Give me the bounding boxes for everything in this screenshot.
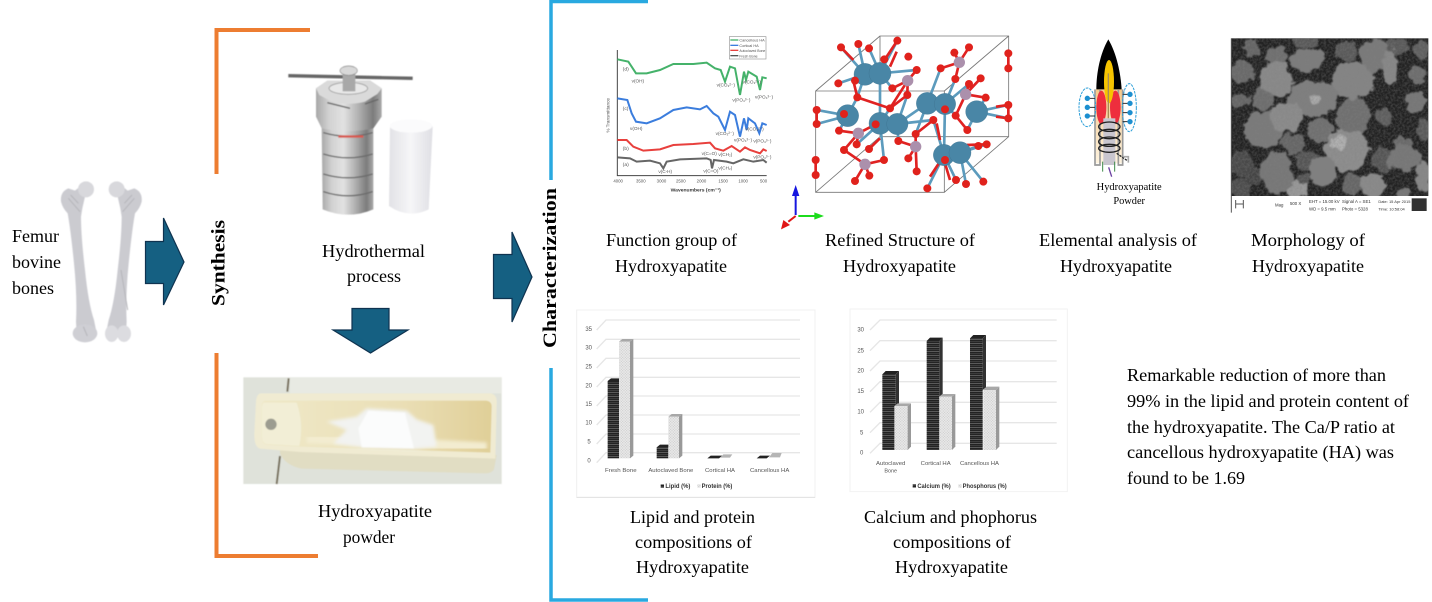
- SEM data bar: Photo = 5328: [1342, 206, 1368, 211]
- text: lipid and protein compositions: Lipid and protein: [630, 507, 755, 527]
- y axis labels: 25: [585, 365, 593, 371]
- image: SEM morphology: [1228, 36, 1431, 213]
- purple atoms: [853, 57, 971, 170]
- axis labels and peak labels: ν(C-H): [658, 169, 672, 174]
- y axis labels: 0: [860, 451, 864, 457]
- text: calcium and phosphorus compositions: [864, 507, 1037, 577]
- y axis labels: 5: [860, 430, 864, 436]
- y axis labels: 20: [857, 369, 865, 375]
- category labels and legend: Cortical HA: [921, 461, 951, 467]
- SEM particle clusters: [1228, 36, 1431, 199]
- bars: cortical HA: [927, 338, 955, 450]
- category labels and legend: Protein (%): [702, 484, 732, 490]
- axis labels and peak labels: ν(C=O): [702, 151, 717, 156]
- category labels and legend: Lipid (%): [665, 484, 690, 490]
- SEM data bar: Date: 15 Apr 2015: [1378, 199, 1411, 204]
- text: hydrothermal process: Hydrothermal: [322, 241, 425, 261]
- category labels and legend: [876, 461, 1007, 490]
- spectrum: d green: [617, 59, 767, 95]
- blue bracket: characterization bottom: [551, 368, 648, 600]
- axis labels and peak labels: (a): [623, 162, 629, 168]
- axis labels and peak labels: 2000: [697, 179, 707, 184]
- image: refined crystal structure: [781, 36, 1012, 229]
- bars: autoclaved bone: [657, 414, 682, 458]
- category labels and legend: Cancellous HA: [750, 468, 790, 474]
- text: refined structure of hydroxyapatite: Hydroxyapatite: [843, 256, 956, 276]
- text: morphology of hydroxyapatite: Hydroxyapatite: [1252, 256, 1364, 276]
- y axis labels: 25: [857, 348, 865, 354]
- white liner: [389, 121, 433, 214]
- y axis labels: 0: [587, 458, 591, 464]
- orange bracket: synthesis bottom: [216, 353, 318, 556]
- yellow flame: [1104, 60, 1114, 103]
- SEM data bar: 500 X: [1290, 201, 1301, 206]
- legend: Cancellous HA: [739, 38, 765, 43]
- category labels and legend: [605, 468, 790, 490]
- red atoms: [812, 37, 1012, 192]
- axis labels and peak labels: 2500: [676, 179, 686, 184]
- y axis labels: [585, 327, 593, 464]
- orange bracket: synthesis top: [216, 30, 310, 174]
- bars: cancellous HA: [970, 335, 999, 450]
- SEM data bar: [1231, 38, 1428, 213]
- axis labels and peak labels: ν(CO₃²⁻): [743, 79, 761, 84]
- axis labels and peak labels: ν(PO₄³⁻): [734, 138, 753, 143]
- axis labels and peak labels: 1000: [738, 179, 749, 184]
- text: lipid and protein compositions: Hydroxyapatite: [636, 557, 749, 577]
- axis labels and peak labels: 1500: [718, 179, 729, 184]
- image: hydrothermal autoclave and liner: [288, 66, 433, 215]
- caption: hydroxyapatite powder: [1097, 182, 1162, 207]
- text: elemental analysis of hydroxyapatite: Elemental analysis of: [1039, 230, 1197, 250]
- SEM data bar: Signal A = SE1: [1342, 199, 1371, 204]
- y axis labels: 35: [585, 327, 593, 333]
- text block: findings summary: Remarkable reduction of more than: [1127, 365, 1386, 385]
- text: lipid and protein compositions: [630, 507, 755, 577]
- y axis labels: [857, 328, 865, 457]
- text: morphology of hydroxyapatite: [1251, 230, 1365, 276]
- axis labels and peak labels: ν(PO₄³⁻): [755, 94, 774, 99]
- heading: characterization: Characterization: [540, 188, 561, 348]
- axis labels and peak labels: (d): [623, 67, 629, 73]
- chart: FTIR spectra: [605, 37, 774, 194]
- SEM data bar: Time: 10:58:04: [1378, 206, 1406, 211]
- axis labels and peak labels: ν(CO₃²⁻): [745, 127, 764, 132]
- blue bracket: characterization top: [551, 2, 648, 180]
- y axis labels: 20: [585, 383, 593, 389]
- spectrum: a grey: [617, 157, 767, 168]
- y axis labels: 10: [857, 410, 865, 416]
- arrow: hydrothermal process to powder: [333, 308, 408, 353]
- text: calcium and phosphorus compositions: Calcium and phophorus: [864, 507, 1037, 527]
- axis labels and peak labels: % Transmittance: [605, 98, 610, 133]
- axis labels and peak labels: 4000: [613, 179, 624, 184]
- category labels and legend: Cancellous HA: [960, 461, 999, 467]
- axis triad icon: [781, 185, 824, 229]
- text: hydroxyapatite powder: [318, 501, 432, 547]
- axis labels and peak labels: (b): [623, 146, 629, 152]
- boat inner: [262, 401, 492, 453]
- text: hydroxyapatite powder: powder: [343, 527, 395, 547]
- axis labels and peak labels: (c): [623, 106, 629, 112]
- text: function group of hydroxyapatite: Function group of: [606, 230, 737, 250]
- coil: [1099, 122, 1127, 161]
- powder: [327, 408, 437, 449]
- bars: autoclaved bone: [882, 371, 911, 450]
- text: calcium and phosphorus compositions: compositions of: [893, 532, 1011, 552]
- axis labels and peak labels: 3000: [657, 179, 667, 184]
- spectrum: c blue: [617, 98, 767, 137]
- text: calcium and phosphorus compositions: Hydroxyapatite: [895, 557, 1008, 577]
- burner tube: [1096, 89, 1122, 163]
- y axis labels: 15: [857, 389, 865, 395]
- text: femur bovine bones: bovine: [12, 252, 61, 272]
- text: function group of hydroxyapatite: Hydroxyapatite: [615, 256, 727, 276]
- red zones: [1096, 91, 1106, 124]
- text: refined structure of hydroxyapatite: [825, 230, 975, 276]
- axis labels and peak labels: ν(OH): [630, 126, 643, 131]
- boat rim: [254, 393, 497, 459]
- unit cell box: [816, 36, 1009, 192]
- legend: Fresh Bone: [739, 53, 758, 58]
- category labels and legend: Cortical HA: [705, 468, 735, 474]
- boat front wall: [280, 447, 497, 473]
- category labels and legend: Autoclaved Bone: [648, 468, 693, 474]
- text: hydroxyapatite powder: Hydroxyapatite: [318, 501, 432, 521]
- arrow: bones to synthesis: [146, 218, 184, 305]
- spectrum: b red: [617, 140, 767, 153]
- text: morphology of hydroxyapatite: Morphology of: [1251, 230, 1365, 250]
- text block: findings summary: 99% in the lipid and protein content of: [1127, 391, 1409, 411]
- category labels and legend: Autoclaved: [876, 461, 905, 467]
- y axis labels: 15: [585, 402, 593, 408]
- heading: synthesis: Synthesis: [210, 220, 230, 306]
- text: femur bovine bones: bones: [12, 278, 54, 298]
- body of autoclave: [322, 125, 373, 215]
- chart: calcium and phosphorus bar chart: [850, 309, 1067, 492]
- teal bonds: [817, 41, 1008, 188]
- bars: cancellous HA: [757, 453, 782, 458]
- legend: Autoclaved Bone: [739, 48, 766, 53]
- axis labels and peak labels: ν(C=O): [703, 169, 719, 174]
- y axis labels: 5: [587, 440, 591, 446]
- y axis labels: 10: [585, 421, 593, 427]
- image: flame spray elemental analysis: [1079, 39, 1162, 207]
- legend: [729, 37, 766, 59]
- axis labels and peak labels: Wavenumbers (cm⁻¹): [671, 188, 721, 194]
- caption: hydroxyapatite powder: Powder: [1113, 196, 1145, 207]
- axis labels and peak labels: ν(CH₂): [718, 165, 733, 170]
- text block: findings summary: found to be 1.69: [1127, 468, 1245, 488]
- black flame: [1096, 39, 1122, 89]
- axis labels and peak labels: [605, 67, 774, 194]
- image: hydroxyapatite powder in boat: [243, 377, 502, 484]
- bars: fresh bone: [608, 339, 633, 458]
- legend: Cortical HA: [739, 43, 759, 48]
- y axis labels: 30: [585, 346, 593, 352]
- text block: findings summary: [1127, 365, 1409, 488]
- handle bar: [288, 76, 413, 78]
- text: femur bovine bones: [12, 226, 61, 298]
- arrow: synthesis to characterization: [494, 232, 532, 322]
- bars: cortical HA: [707, 454, 732, 458]
- text: hydrothermal process: process: [347, 266, 401, 286]
- SEM data bar: EHT = 15.00 kV: [1309, 199, 1340, 204]
- axis labels and peak labels: ν(PO₄³⁻): [753, 138, 772, 143]
- axis labels and peak labels: ν(CH₂): [718, 152, 733, 157]
- axis labels and peak labels: 500: [760, 179, 768, 184]
- axis labels and peak labels: 3500: [636, 179, 646, 184]
- icon: femur bones: [61, 181, 142, 342]
- red bonds: [816, 41, 1008, 181]
- axis labels and peak labels: ν(CO₃²⁻): [716, 131, 734, 136]
- chart: lipid and protein bar chart: [577, 310, 815, 497]
- teal atoms: [837, 62, 988, 166]
- text: elemental analysis of hydroxyapatite: [1039, 230, 1197, 276]
- category labels and legend: Calcium (%): [917, 484, 951, 490]
- text: elemental analysis of hydroxyapatite: Hydroxyapatite: [1060, 256, 1172, 276]
- y axis labels: 30: [857, 328, 865, 334]
- lid of autoclave: [316, 81, 382, 131]
- category labels and legend: Bone: [884, 468, 897, 474]
- category labels and legend: Fresh Bone: [605, 468, 637, 474]
- blue ovals with nozzles: [1079, 84, 1136, 132]
- central lance: [1103, 118, 1115, 165]
- text block: findings summary: the hydroxyapatite. The Ca/P ratio at: [1127, 417, 1395, 437]
- SEM data bar: Mag: [1275, 203, 1284, 208]
- axis labels and peak labels: ν(PO₄³⁻): [753, 154, 772, 159]
- caption: hydroxyapatite powder: Hydroxyapatite: [1097, 182, 1162, 193]
- SEM data bar: WD = 9.5 mm: [1309, 206, 1336, 211]
- category labels and legend: Phosphorus (%): [963, 484, 1007, 490]
- text: femur bovine bones: Femur: [12, 226, 59, 246]
- axis labels and peak labels: ν(OH): [632, 78, 645, 83]
- text: refined structure of hydroxyapatite: Refined Structure of: [825, 230, 975, 250]
- text: lipid and protein compositions: compositions of: [635, 532, 752, 552]
- axis labels and peak labels: ν(PO₄³⁻): [732, 97, 751, 102]
- text: hydrothermal process: [322, 241, 425, 286]
- text block: findings summary: cancellous hydroxyapatite (HA) was: [1127, 442, 1394, 463]
- axis labels and peak labels: ν(CO₃²⁻): [717, 83, 735, 88]
- text: function group of hydroxyapatite: [606, 230, 737, 276]
